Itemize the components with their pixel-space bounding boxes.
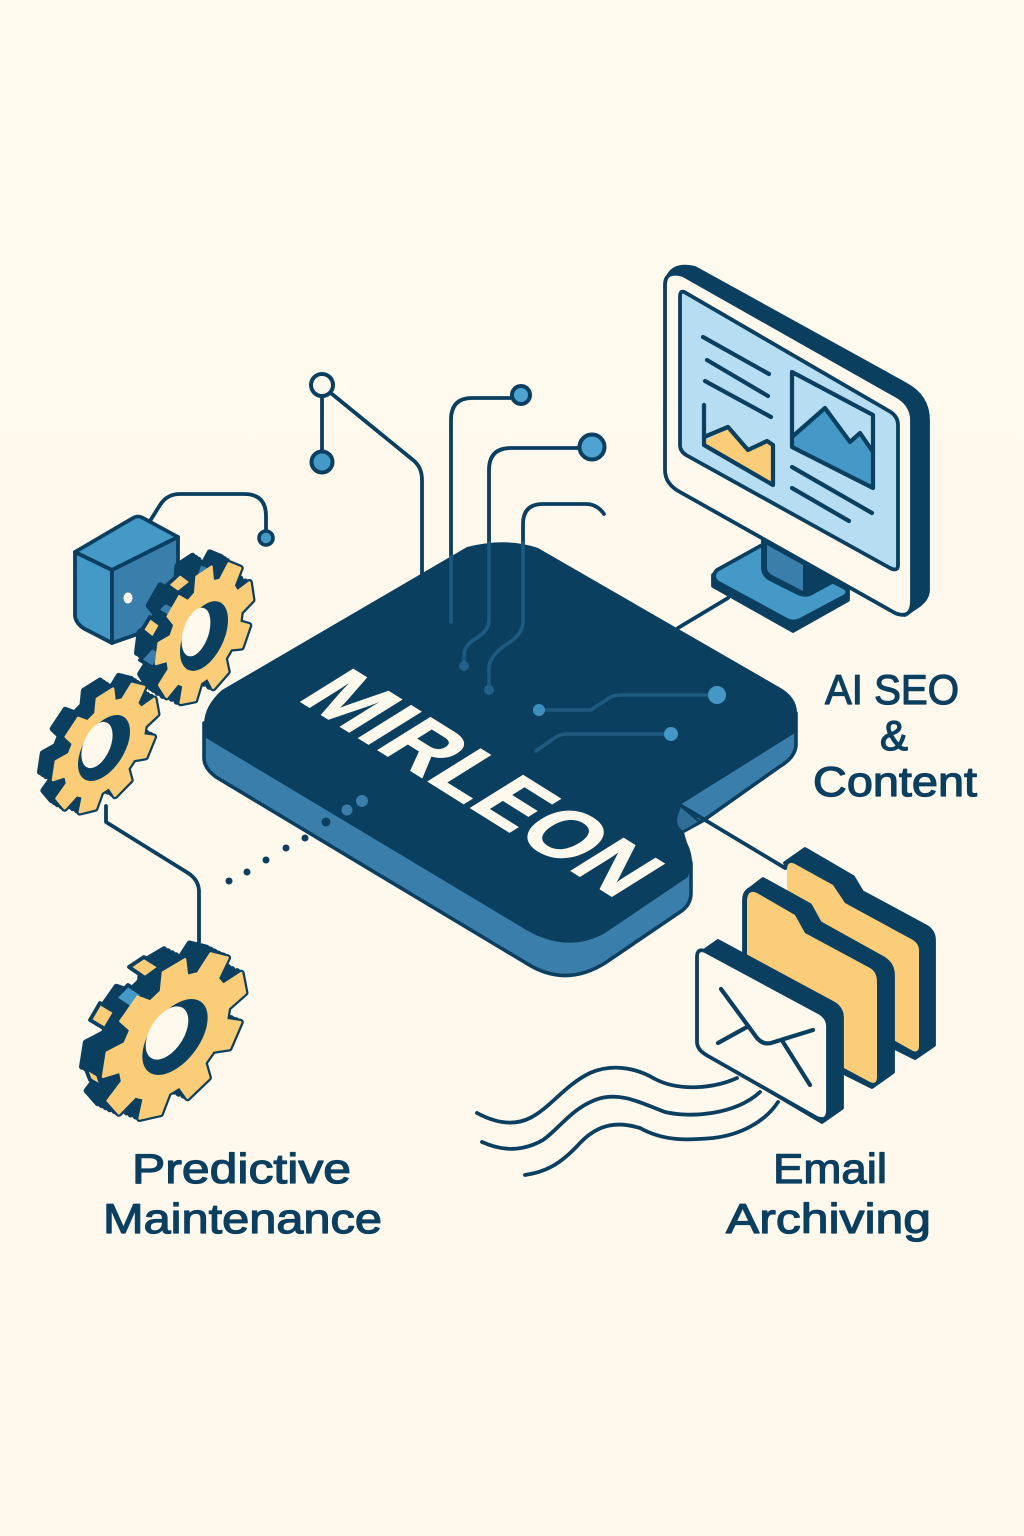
connector to folders [680, 805, 785, 868]
envelope flap lines [718, 989, 813, 1085]
middle folder [744, 879, 893, 1087]
notch [676, 805, 700, 832]
monitor connector wire [678, 598, 728, 628]
gear body depth [137, 529, 252, 726]
gear face [103, 924, 245, 1148]
label: Email Archiving: Email [773, 1145, 887, 1192]
label: Predictive Maintenance [103, 1145, 382, 1242]
label: Predictive Maintenance: Maintenance [103, 1195, 382, 1242]
monitor face [665, 274, 912, 615]
gear body depth [40, 653, 157, 835]
platform MIRLEON [204, 542, 797, 976]
label: Email Archiving [726, 1145, 931, 1242]
gear face [156, 540, 252, 726]
gear hole [180, 589, 228, 683]
platform top [204, 542, 797, 943]
box right face [112, 537, 178, 643]
label: AI SEO & Content: Content [813, 758, 977, 805]
circuit line with hollow node [311, 374, 422, 575]
tooth facets [85, 957, 160, 1087]
email wave lines [477, 1068, 778, 1175]
icon: gear lower [82, 914, 245, 1148]
label: Predictive Maintenance: Predictive [132, 1145, 351, 1192]
circuit line four [523, 504, 604, 550]
gear hole [142, 985, 208, 1089]
icon: monitor [665, 267, 928, 631]
label: AI SEO & Content [813, 666, 977, 805]
label: AI SEO & Content: & [880, 712, 908, 759]
image with mountain [792, 372, 873, 488]
envelope [697, 941, 842, 1122]
yellow area chart [704, 405, 773, 485]
monitor base top [714, 545, 848, 622]
monitor neck [763, 540, 832, 595]
upper circuit lines and nodes [311, 374, 604, 580]
circuit line two [451, 386, 530, 580]
gear face [53, 661, 157, 835]
icon: gear middle [40, 653, 157, 835]
gear body depth [82, 914, 245, 1148]
box device cable [150, 494, 273, 545]
brand wordmark: MIRLEON [279, 657, 684, 910]
monitor body depth [666, 267, 928, 615]
text lines [703, 337, 872, 521]
gear links [106, 806, 199, 942]
icon: gear upper [137, 529, 252, 726]
platform side [204, 713, 796, 976]
circuit line three [489, 434, 604, 550]
tooth facets [140, 563, 212, 668]
gear hole [78, 703, 130, 793]
label: AI SEO & Content: AI SEO [825, 666, 959, 713]
platform circuit traces [322, 543, 726, 826]
monitor stand base [713, 575, 848, 631]
box indicator [124, 592, 132, 604]
icon: folders and envelope [477, 849, 934, 1175]
label: Email Archiving: Archiving [726, 1195, 931, 1242]
monitor screen [680, 292, 898, 569]
back folder [785, 849, 934, 1058]
box top face [75, 516, 178, 570]
dotted connector [226, 834, 308, 884]
box left face [75, 552, 112, 643]
icon: blue box [75, 516, 178, 643]
